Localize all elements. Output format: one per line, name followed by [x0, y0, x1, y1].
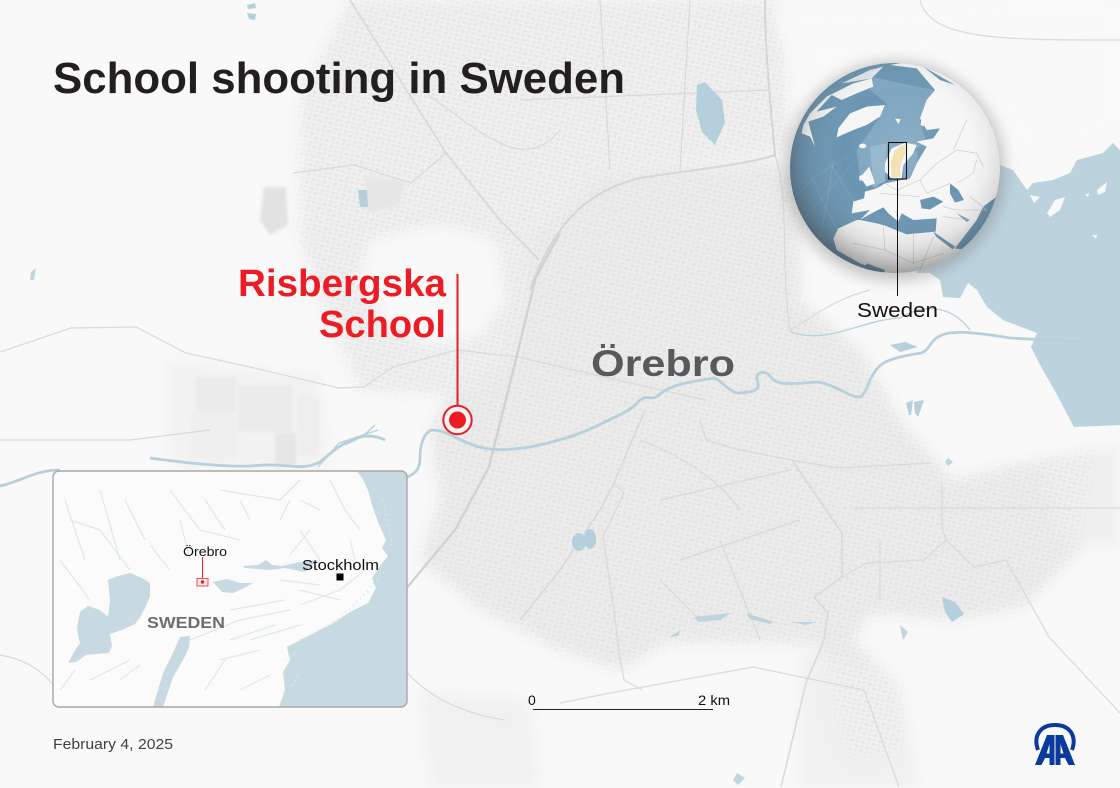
label: Risbergska School	[238, 263, 447, 346]
inner seas	[860, 115, 1003, 275]
top arctic sea strip	[923, 67, 955, 85]
graticule	[795, 157, 857, 237]
inset map panel	[53, 471, 407, 707]
scale bar: 2 km	[698, 692, 730, 708]
globe shading	[790, 63, 1000, 273]
land: Greenland	[837, 105, 885, 137]
logo: AA	[1035, 725, 1075, 765]
farm fields	[190, 177, 404, 467]
Sweden leader line	[896, 179, 898, 296]
lake Vänern	[68, 573, 150, 663]
land: Iceland	[859, 144, 866, 148]
Sweden highlight	[891, 144, 905, 177]
lake Hjälmaren	[910, 143, 1120, 427]
date: February 4, 2025	[53, 737, 173, 753]
label: Sweden: Sweden	[857, 300, 938, 322]
lake islands	[1030, 182, 1107, 239]
label: Risbergska School: Risbergska	[238, 263, 447, 305]
ocean	[790, 63, 1000, 273]
land: Britain	[859, 167, 875, 187]
inset border	[53, 471, 407, 707]
scale bar: 0	[528, 692, 536, 708]
country borders	[853, 120, 987, 270]
title: School shooting in Sweden	[53, 54, 625, 103]
label: Örebro: Örebro	[591, 343, 735, 384]
lake Vättern	[153, 636, 190, 707]
land: North America	[802, 78, 873, 147]
river Svartån	[0, 309, 1081, 486]
scale bar	[528, 692, 730, 710]
globe with Europe view	[770, 50, 1023, 296]
marker: school location	[443, 274, 472, 434]
land: Scandinavia	[885, 143, 917, 178]
urban street texture	[308, 6, 1080, 751]
inset label: Stockholm: Stockholm	[302, 558, 379, 574]
Sweden locator box	[888, 142, 906, 179]
forest clearings	[360, 0, 1120, 345]
inset marker: Örebro	[197, 557, 208, 586]
label: Risbergska School: School	[319, 304, 446, 346]
small inset waterways	[60, 480, 392, 690]
Baltic sea	[279, 471, 407, 707]
inset marker: Stockholm	[336, 574, 344, 580]
inset label: Örebro: Örebro	[183, 545, 227, 559]
globe shadow	[785, 61, 1005, 281]
land: Eurasia and Africa	[833, 63, 1000, 273]
inset label: SWEDEN: SWEDEN	[147, 615, 225, 632]
northern seas, lighter	[857, 77, 933, 190]
lakes Hjälmaren and Mälaren	[213, 560, 318, 593]
